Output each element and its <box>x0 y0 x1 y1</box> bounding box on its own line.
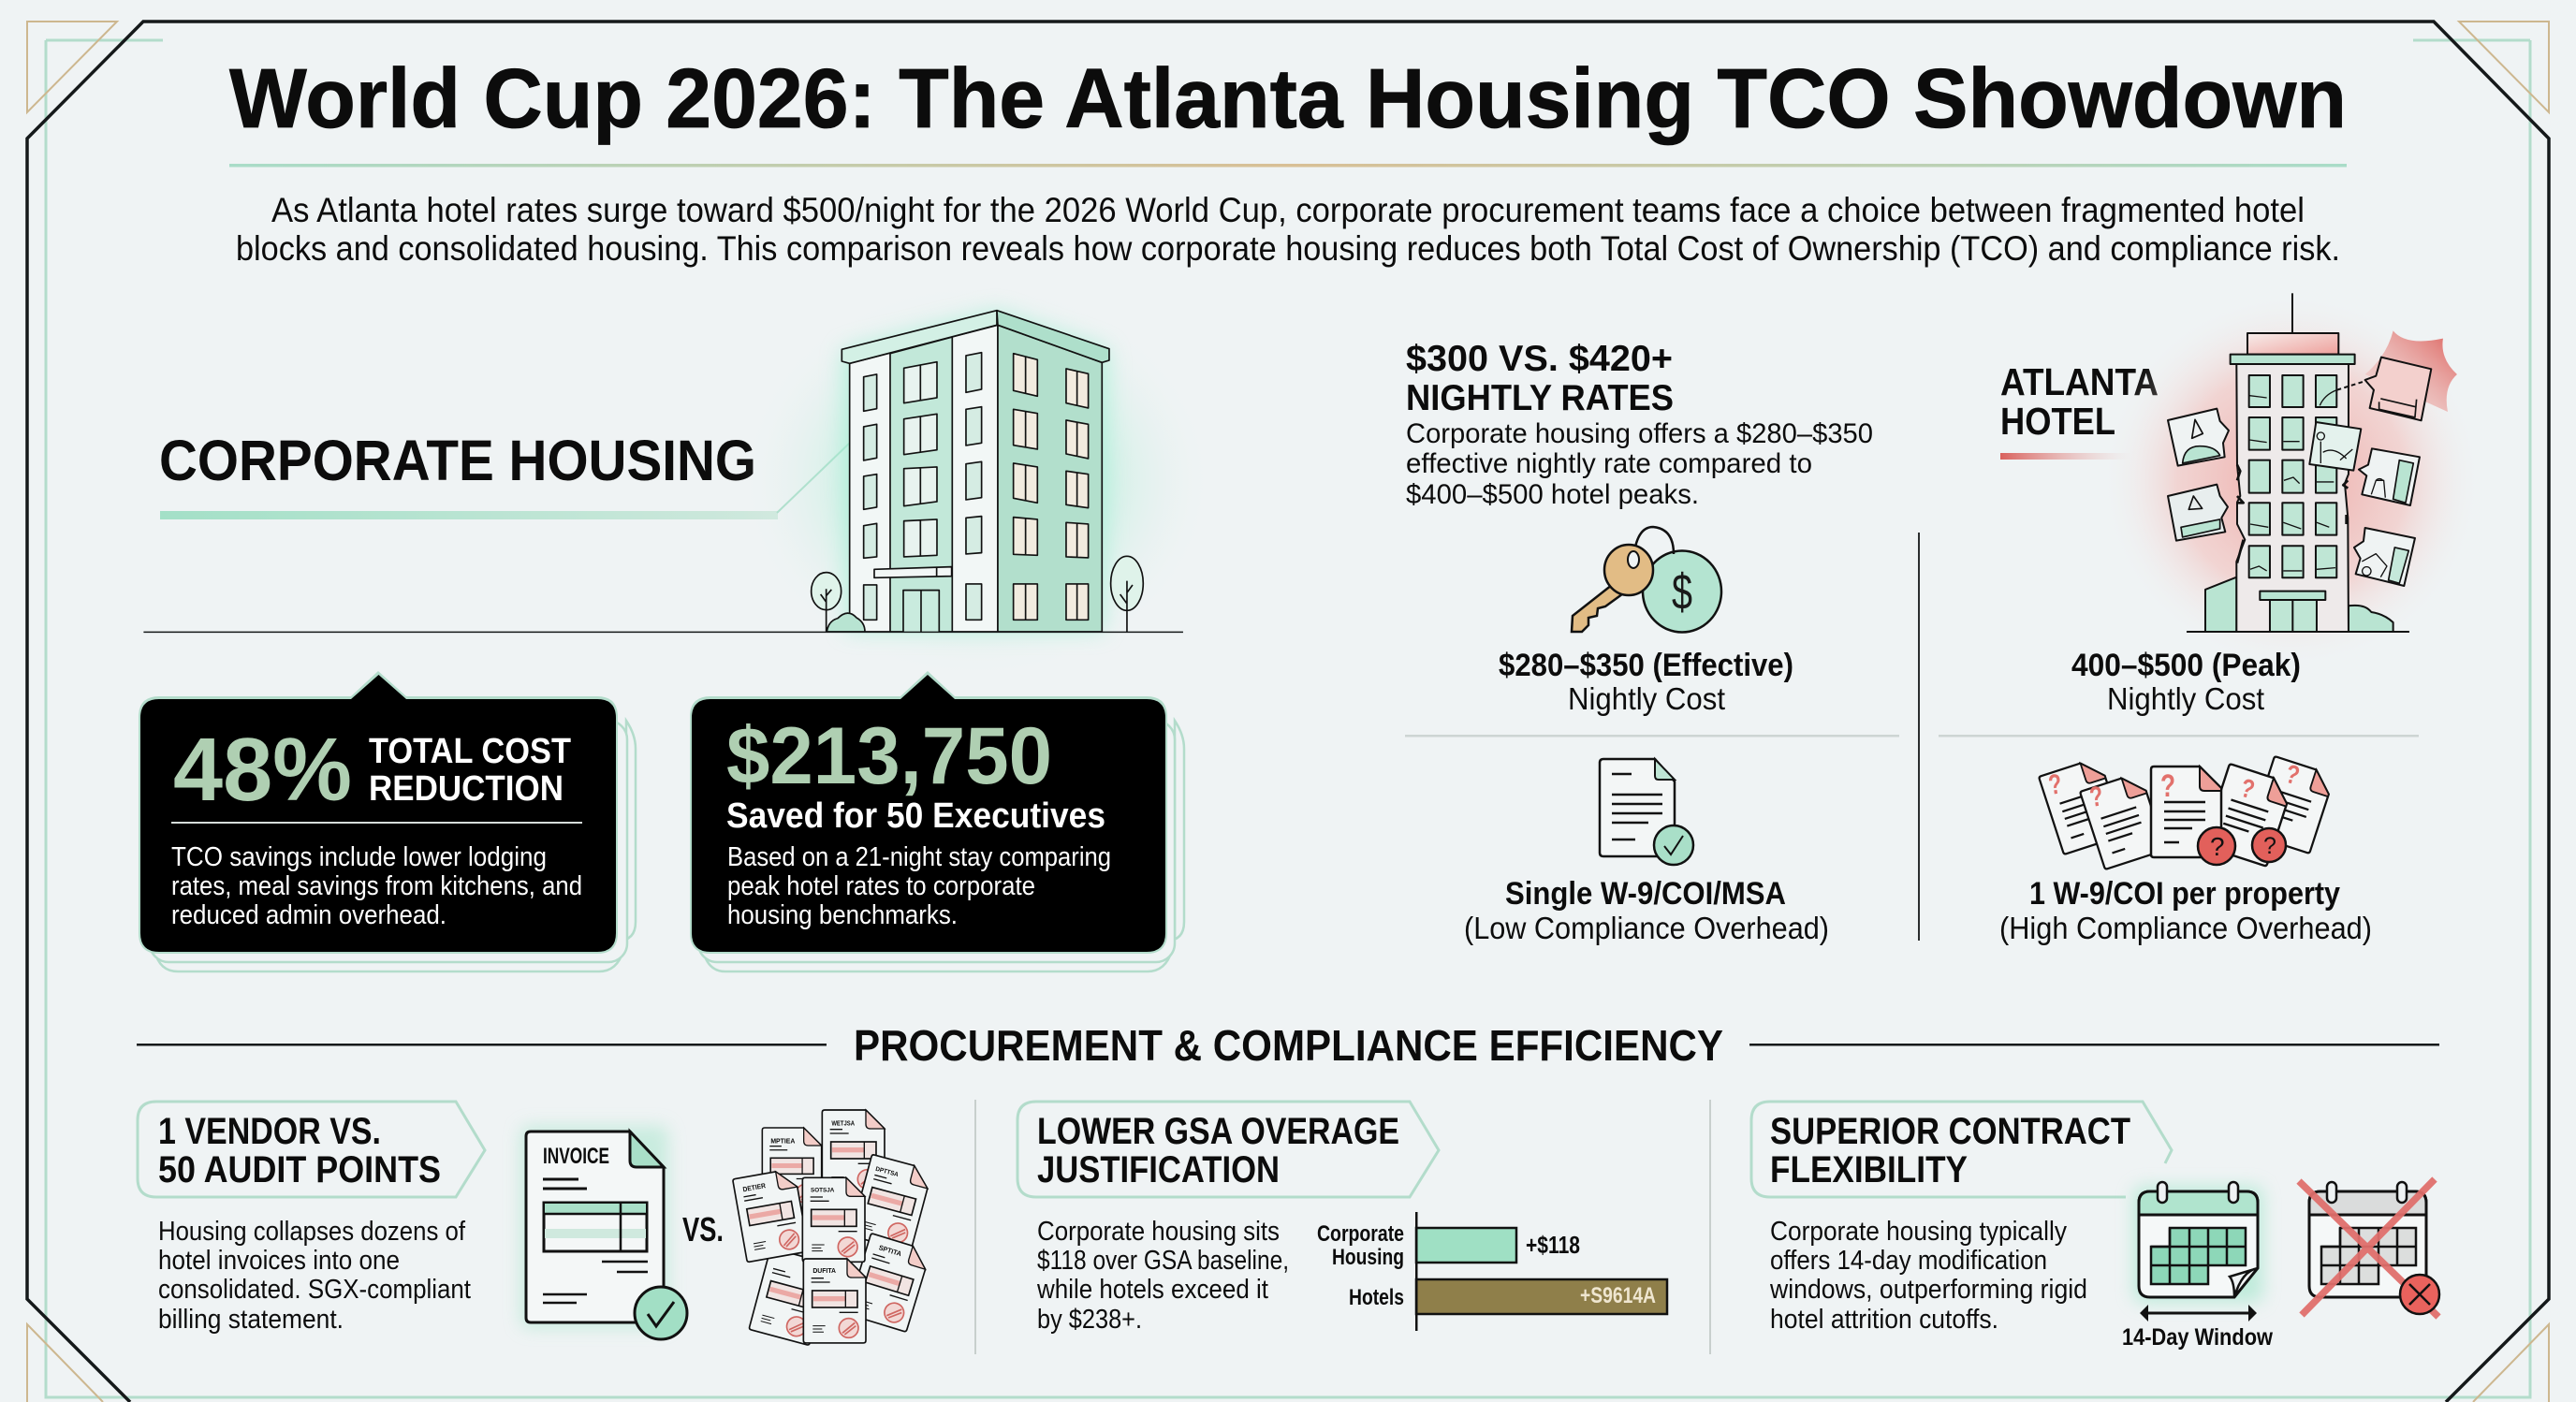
intro text: blocks and consolidated housing. This comparison reveals how corporate housing reduces both Total Cost of Ownership (TCO) and compliance risk. <box>236 229 2340 268</box>
icon: pile of invoices: DPTTSA <box>874 1166 900 1178</box>
heading: atlanta hotel: ATLANTA <box>2000 360 2159 403</box>
icon: multiple compliance documents: ? <box>2087 781 2105 813</box>
body text: Corporate housing typically <box>1770 1217 2067 1247</box>
icon: single invoice <box>520 1126 687 1339</box>
text block: nightly rates: $300 VS. $420+ <box>1406 339 1673 379</box>
icon: pile of invoices: DETIER <box>742 1181 767 1193</box>
card: $213,750 saved <box>690 671 1184 971</box>
text block: nightly rates: $400–$500 hotel peaks. <box>1406 479 1699 510</box>
card: $213,750 saved: $213,750 <box>726 711 1052 801</box>
body text: consolidated. SGX-compliant <box>158 1275 471 1305</box>
text block: nightly rates: NIGHTLY RATES <box>1406 378 1674 418</box>
icon: multiple compliance documents: ? <box>2282 759 2303 790</box>
body text: while hotels exceed it <box>1036 1275 1268 1305</box>
title: World Cup 2026: The Atlanta Housing TCO Showdown <box>229 52 2347 146</box>
icon: multiple compliance documents <box>2039 756 2334 869</box>
icon: 14-day calendar <box>2133 1182 2263 1322</box>
hotel rate label: Nightly Cost <box>2107 681 2264 716</box>
icon: key and dollar coin <box>1572 527 1721 633</box>
icon: multiple compliance documents: ? <box>2237 773 2258 804</box>
text block: nightly rates <box>1406 339 1873 510</box>
tag heading <box>1751 1102 2172 1197</box>
body text <box>1036 1217 1289 1335</box>
body text: offers 14-day modification <box>1770 1246 2047 1276</box>
bar chart: Housing <box>1332 1245 1404 1270</box>
divider between options <box>1918 533 1920 941</box>
card: $213,750 saved: Saved for 50 Executives <box>726 796 1105 836</box>
panel: superior contract flexibility <box>1751 1102 2439 1351</box>
bar chart: Corporate <box>1317 1221 1404 1247</box>
body text: Corporate housing sits <box>1037 1217 1280 1247</box>
body text: Housing collapses dozens of <box>158 1217 466 1247</box>
vs label: VS. <box>682 1210 724 1249</box>
body text <box>158 1217 471 1335</box>
body text: $118 over GSA baseline, <box>1037 1246 1289 1276</box>
card: $213,750 saved: peak hotel rates to corporate <box>727 871 1035 901</box>
icon: multiple compliance documents: ? <box>2263 833 2276 859</box>
body text: windows, outperforming rigid <box>1769 1275 2087 1305</box>
section heading: procurement and compliance: PROCUREMENT & COMPLIANCE EFFICIENCY <box>854 1021 1723 1070</box>
icon: single compliance document <box>1600 759 1693 865</box>
compliance label: corporate <box>1464 876 1829 945</box>
icon: multiple compliance documents: ? <box>2210 832 2225 861</box>
icon: pile of invoices: SOTSJA <box>811 1187 834 1193</box>
heading: atlanta hotel <box>2000 360 2159 460</box>
hotel rate label <box>2071 648 2301 716</box>
card: $213,750 saved: housing benchmarks. <box>727 900 958 930</box>
corporate rate label: Nightly Cost <box>1568 681 1725 716</box>
icon: pile of invoices: WETJSA <box>831 1119 856 1128</box>
icon: pile of invoices: DUFITA <box>812 1266 837 1275</box>
card: 48% total cost reduction: rates, meal savings from kitchens, and <box>171 871 582 901</box>
compliance label: hotel: (High Compliance Overhead) <box>1999 911 2372 945</box>
tag heading: 1 VENDOR VS. <box>158 1111 381 1152</box>
text block: nightly rates: effective nightly rate compared to <box>1406 448 1812 479</box>
calendar label: 14-Day Window <box>2122 1324 2273 1351</box>
illustration: corporate building <box>143 281 1214 680</box>
corporate rate label <box>1499 648 1793 716</box>
compliance label: corporate: Single W-9/COI/MSA <box>1505 876 1786 912</box>
icon: pile of invoices: SPTITA <box>878 1243 903 1258</box>
icon: multiple compliance documents: ? <box>2160 768 2175 804</box>
body text: hotel attrition cutoffs. <box>1770 1305 1998 1335</box>
illustration: crumbling hotel <box>2101 293 2482 667</box>
card: 48% total cost reduction: reduced admin overhead. <box>171 900 446 930</box>
compliance label: corporate: (Low Compliance Overhead) <box>1464 911 1829 945</box>
bar chart: +$118 <box>1526 1231 1580 1259</box>
corporate rate label: $280–$350 (Effective) <box>1499 648 1793 683</box>
card: 48% total cost reduction: 48% <box>173 720 352 820</box>
heading: corporate housing <box>159 429 850 519</box>
heading: corporate housing: CORPORATE HOUSING <box>159 429 756 492</box>
panel: corporate housing hero <box>143 281 1214 680</box>
intro text <box>236 191 2340 268</box>
body text: by $238+. <box>1037 1305 1142 1335</box>
heading: atlanta hotel: HOTEL <box>2000 400 2115 443</box>
icon: pile of invoices <box>733 1110 932 1345</box>
icon: key and dollar coin: $ <box>1672 564 1692 621</box>
tag heading <box>1017 1102 1439 1197</box>
hotel rate label: 400–$500 (Peak) <box>2071 648 2301 683</box>
hotel fragments <box>2168 358 2431 586</box>
tag heading: SUPERIOR CONTRACT <box>1770 1111 2130 1152</box>
card: 48% total cost reduction <box>139 671 636 971</box>
card: $213,750 saved: Based on a 21-night stay comparing <box>727 842 1111 872</box>
icon: single invoice: INVOICE <box>543 1144 609 1169</box>
bar chart: +S9614A <box>1580 1283 1656 1308</box>
card: 48% total cost reduction: REDUCTION <box>369 769 564 809</box>
compliance label: hotel: 1 W-9/COI per property <box>2029 876 2340 912</box>
body text <box>1769 1217 2087 1335</box>
tag heading: 50 AUDIT POINTS <box>158 1149 441 1190</box>
compliance label: hotel <box>1999 876 2372 945</box>
tag heading: LOWER GSA OVERAGE <box>1037 1111 1399 1152</box>
icon: multiple compliance documents: ? <box>2046 768 2064 801</box>
bar chart: Hotels <box>1349 1285 1404 1310</box>
panel: lower GSA overage <box>1017 1102 1667 1335</box>
intro text: As Atlanta hotel rates surge toward $500/night for the 2026 World Cup, corporate procurement teams face a choice between fragmented hotel <box>271 191 2305 229</box>
card: 48% total cost reduction: TCO savings include lower lodging <box>171 842 547 872</box>
panel: 1 vendor vs 50 audit points <box>138 1102 932 1345</box>
tag heading <box>138 1102 485 1197</box>
bar chart <box>1317 1212 1667 1331</box>
icon: pile of invoices: MPTIEA <box>770 1137 796 1146</box>
body text: billing statement. <box>158 1305 344 1335</box>
text block: nightly rates: Corporate housing offers a $280–$350 <box>1406 418 1873 449</box>
tag heading: JUSTIFICATION <box>1037 1149 1280 1190</box>
card: 48% total cost reduction: TOTAL COST <box>369 732 571 771</box>
body text: hotel invoices into one <box>158 1246 400 1276</box>
icon: crossed-out calendar <box>2299 1179 2439 1317</box>
tag heading: FLEXIBILITY <box>1770 1149 1968 1190</box>
